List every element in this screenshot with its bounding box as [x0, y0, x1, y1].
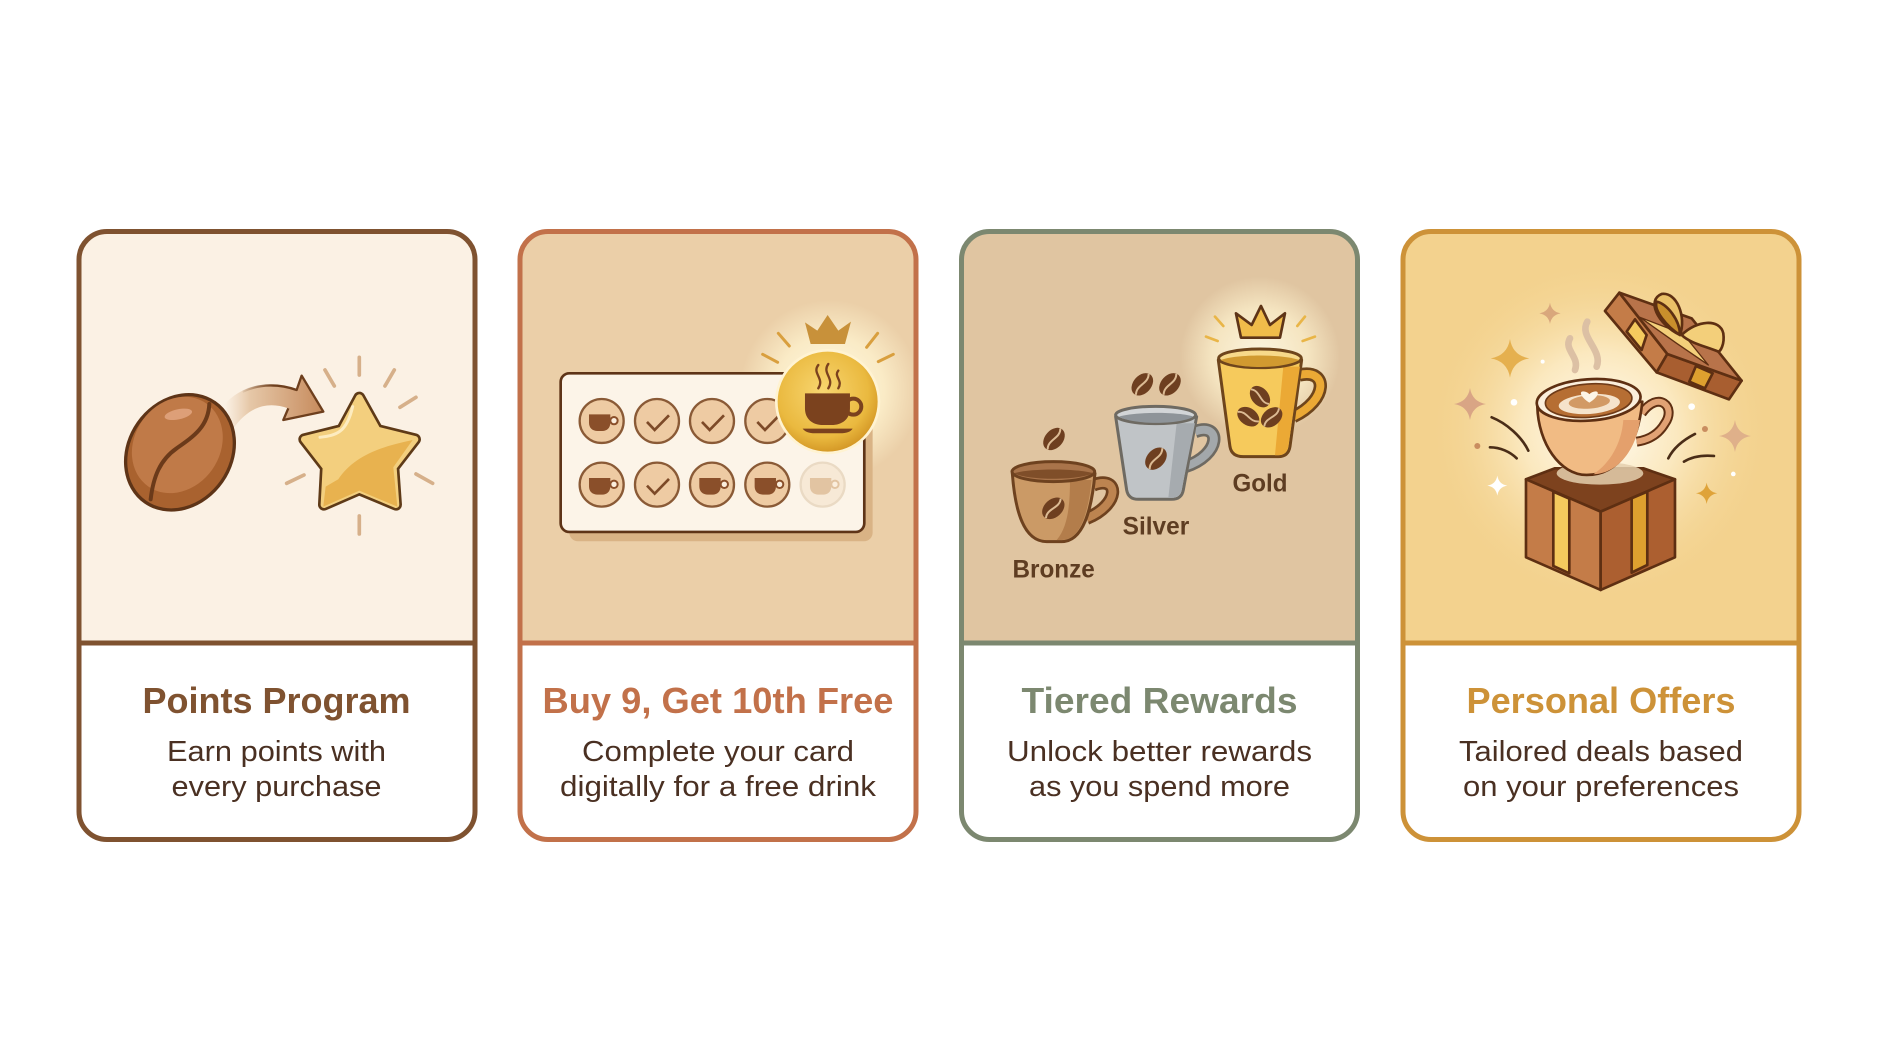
- steam: [1568, 322, 1598, 370]
- heading: points program: Points Program: [142, 680, 410, 721]
- text: offers description: Tailored deals based: [1459, 736, 1743, 768]
- stamp row one: [580, 399, 789, 443]
- rays around coin: [763, 333, 893, 362]
- glow behind coin: [740, 300, 920, 480]
- icon: crown: [805, 315, 851, 344]
- illustration: tiered mugs: [1012, 277, 1340, 583]
- text: points description: [167, 736, 386, 803]
- text: tiers description: [1007, 736, 1312, 803]
- illustration: coffee bean becoming a star: [103, 357, 433, 534]
- glow behind gold mug: [1180, 277, 1340, 437]
- icon: gold coin with cup: [775, 349, 880, 454]
- heading: tiered rewards: Tiered Rewards: [1022, 680, 1298, 721]
- icon: bronze mug: [1012, 424, 1113, 542]
- motion lines: [1490, 417, 1714, 462]
- text: tiers description: as you spend more: [1029, 771, 1290, 803]
- text: offers description: on your preferences: [1463, 771, 1739, 803]
- label: gold: Gold: [1232, 471, 1287, 498]
- panel: tiered rewards card: [962, 232, 1358, 840]
- text: points description: Earn points with: [167, 736, 386, 768]
- illustration: gift box with coffee: [1427, 257, 1773, 603]
- heading: buy 9 get 10th free: Buy 9, Get 10th Free: [542, 680, 894, 721]
- icon: coffee bean: [103, 373, 257, 531]
- icon: gift box: [1526, 468, 1675, 590]
- text: stamp card description: [560, 736, 877, 803]
- text: stamp card description: digitally for a free drink: [560, 771, 877, 803]
- label: bronze: Bronze: [1012, 556, 1095, 583]
- icon: gift lid: [1605, 293, 1742, 399]
- text: offers description: [1459, 736, 1743, 803]
- panel: buy 9 get 10th free card: [520, 232, 920, 840]
- icon: gold star with rays: [287, 357, 433, 534]
- text: points description: every purchase: [172, 771, 382, 803]
- icon: latte cup: [1535, 376, 1669, 485]
- glow behind cup: [1427, 257, 1773, 603]
- illustration: digital stamp card: [561, 300, 920, 541]
- stamp row two: [580, 463, 845, 507]
- icon: gold mug with crown: [1206, 306, 1320, 457]
- label: silver: Silver: [1123, 513, 1190, 540]
- text: stamp card description: Complete your card: [582, 736, 854, 768]
- panel: personal offers card: [1403, 232, 1799, 840]
- icon: stamp card: [561, 373, 873, 541]
- icon: silver mug: [1116, 369, 1214, 499]
- heading: personal offers: Personal Offers: [1466, 680, 1736, 721]
- icon: arrow: [225, 376, 323, 428]
- sparkles: [1454, 303, 1751, 504]
- panel: points program card: [79, 232, 475, 840]
- text: tiers description: Unlock better rewards: [1007, 736, 1312, 768]
